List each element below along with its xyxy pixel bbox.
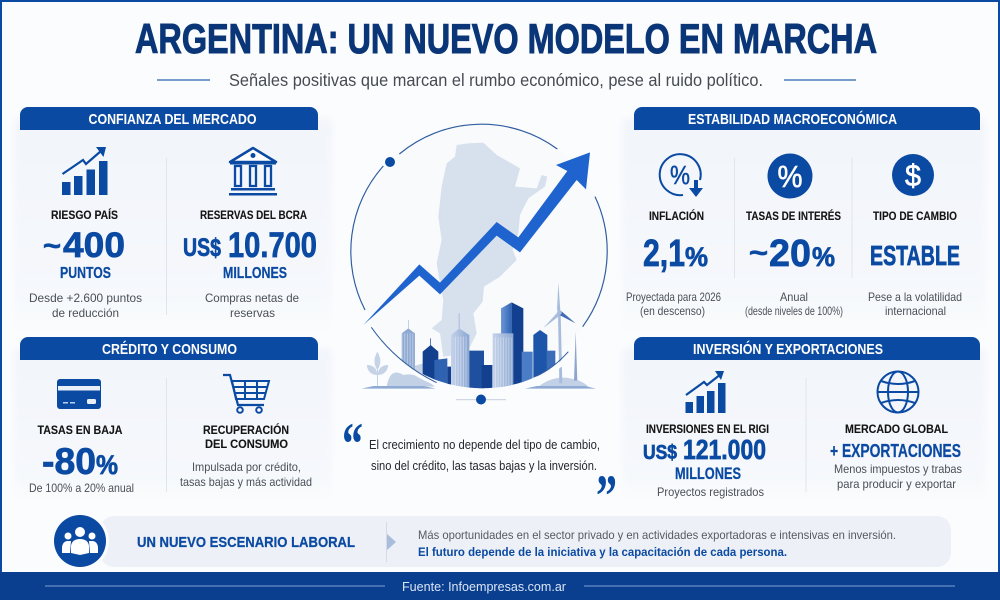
metric: tasas de interés — [745, 210, 843, 318]
central illustration — [351, 123, 608, 404]
metric: riesgo país: 400 — [63, 226, 125, 265]
metric: tasas en baja: TASAS EN BAJA — [38, 425, 122, 437]
metric: reservas del bcra: 10.700 — [228, 226, 317, 265]
icon: people — [51, 512, 109, 570]
metric: inversiones en el rigi: US$ — [643, 442, 677, 464]
metric: inflación: (en descenso) — [640, 304, 705, 318]
banner: nuevo escenario laboral: UN NUEVO ESCENARIO LABORAL — [137, 534, 355, 551]
icon: falling inflation — [660, 154, 703, 197]
heading: estabilidad macroeconómica — [634, 107, 980, 130]
text: mercado global: para producir y exportar — [837, 477, 956, 491]
heading: confianza del mercado — [20, 107, 318, 130]
metric: tasas en baja: -80 — [42, 441, 96, 482]
quote: ” — [596, 463, 617, 529]
arrow — [387, 534, 396, 550]
metric: riesgo país: RIESGO PAÍS — [51, 209, 118, 222]
metric: riesgo país: ~ — [43, 231, 61, 261]
metric: inflación: % — [685, 242, 708, 272]
text: recuperación del consumo — [180, 424, 312, 489]
metric: reservas del bcra: reservas — [230, 306, 275, 320]
metric: riesgo país — [29, 209, 142, 320]
illustration: growth arrow — [363, 152, 590, 325]
metric: tasas de interés: ~ — [749, 238, 768, 268]
text: mercado global: + EXPORTACIONES — [830, 441, 961, 461]
text: recuperación del consumo: tasas bajas y más actividad — [180, 475, 312, 489]
heading: inversión y exportaciones — [634, 337, 980, 360]
footer: Fuente: Infoempresas.com.ar — [402, 579, 567, 594]
icon: globe — [878, 372, 918, 412]
metric: tasas en baja: De 100% a 20% anual — [29, 481, 134, 495]
banner: nuevo escenario laboral: Más oportunidades en el sector privado y en actividades exportadoras e intensivas en inversión. — [418, 528, 896, 542]
icon: dollar — [892, 154, 934, 196]
icon: rising bar chart — [62, 147, 108, 195]
illustration: white swoosh — [371, 331, 571, 391]
metric: tipo de cambio — [868, 211, 962, 318]
metric: inflación: Proyectada para 2026 — [626, 290, 721, 304]
metric: tasas de interés: Anual — [780, 290, 808, 304]
panel: estabilidad macroeconómica — [622, 107, 986, 330]
icon: bank — [229, 148, 277, 196]
illustration: lower arc — [371, 327, 568, 383]
panel: crédito y consumo — [14, 337, 332, 500]
heading: estabilidad macroeconómica: ESTABILIDAD MACROECONÓMICA — [688, 110, 897, 128]
metric: reservas del bcra: RESERVAS DEL BCRA — [200, 210, 307, 222]
metric: tipo de cambio: internacional — [885, 304, 946, 318]
illustration: wind turbines — [543, 283, 577, 383]
metric: inversiones en el rigi: MILLONES — [675, 465, 741, 483]
metric: inflación — [626, 210, 721, 318]
panel: confianza del mercado — [14, 107, 332, 330]
illustration: ring — [351, 123, 608, 379]
quote: sino del crédito, las tasas bajas y la inversión. — [371, 459, 597, 473]
heading: confianza del mercado: CONFIANZA DEL MERCADO — [88, 111, 257, 128]
footer — [0, 572, 1000, 600]
metric: tipo de cambio: TIPO DE CAMBIO — [873, 211, 957, 223]
metric: inversiones en el rigi — [643, 424, 769, 499]
banner: nuevo escenario laboral: El futuro depende de la iniciativa y la capacitación de cada persona. — [418, 545, 787, 559]
metric: inversiones en el rigi: INVERSIONES EN EL RIGI — [646, 424, 769, 436]
icon: interest percent — [768, 154, 812, 198]
metric: tasas de interés: (desde niveles de 100%) — [745, 304, 843, 318]
icon: dollar: $ — [905, 158, 921, 193]
metric: inversiones en el rigi: Proyectos registrados — [657, 485, 764, 499]
icon: falling inflation: % — [670, 160, 690, 190]
metric: inflación: INFLACIÓN — [649, 210, 704, 223]
metric: reservas del bcra: US$ — [183, 234, 221, 262]
illustration: ring dots — [385, 157, 506, 404]
icon: shopping cart — [223, 375, 269, 413]
metric: tasas de interés: % — [812, 242, 835, 272]
metric: riesgo país: de reducción — [52, 306, 119, 320]
icon: credit card — [57, 379, 101, 409]
metric: reservas del bcra: Compras netas de — [205, 291, 299, 305]
banner: nuevo escenario laboral — [51, 512, 951, 570]
illustration: ground and plants — [362, 352, 596, 389]
metric: reservas del bcra — [183, 210, 317, 320]
metric: tasas en baja: % — [96, 450, 118, 480]
metric: tipo de cambio: Pese a la volatilidad — [868, 290, 962, 304]
metric: tipo de cambio: ESTABLE — [870, 240, 960, 271]
text: mercado global: Menos impuestos y trabas — [834, 462, 962, 476]
text: recuperación del consumo: RECUPERACIÓN — [203, 424, 289, 437]
text: recuperación del consumo: DEL CONSUMO — [205, 439, 288, 451]
subtitle: Señales positivas que marcan el rumbo económico, pese al ruido político. — [229, 70, 763, 90]
heading: inversión y exportaciones: INVERSIÓN Y EXPORTACIONES — [693, 340, 883, 358]
illustration: argentina map — [432, 143, 547, 357]
quote: El crecimiento no depende del tipo de cambio, — [369, 438, 600, 452]
metric: tasas de interés: TASAS DE INTERÉS — [746, 210, 841, 223]
metric: reservas del bcra: MILLONES — [223, 265, 287, 282]
text: mercado global: MERCADO GLOBAL — [845, 424, 948, 436]
metric: tasas de interés: 20 — [769, 233, 811, 275]
panel: inversión y exportaciones — [622, 337, 986, 500]
icon: investment bars — [686, 371, 726, 413]
text: recuperación del consumo: Impulsada por crédito, — [192, 460, 301, 474]
quote: “ — [342, 411, 363, 477]
illustration: city skyline — [402, 302, 555, 390]
metric: riesgo país: Desde +2.600 puntos — [29, 291, 142, 305]
quote — [342, 411, 617, 529]
metric: tasas en baja — [29, 425, 134, 495]
metric: riesgo país: PUNTOS — [60, 265, 111, 282]
text: mercado global — [830, 424, 962, 491]
metric: inflación: 2,1 — [643, 233, 685, 275]
metric: inversiones en el rigi: 121.000 — [683, 434, 766, 465]
heading: crédito y consumo: CRÉDITO Y CONSUMO — [102, 341, 237, 358]
icon: interest percent: % — [778, 159, 802, 194]
heading: crédito y consumo — [20, 337, 318, 360]
